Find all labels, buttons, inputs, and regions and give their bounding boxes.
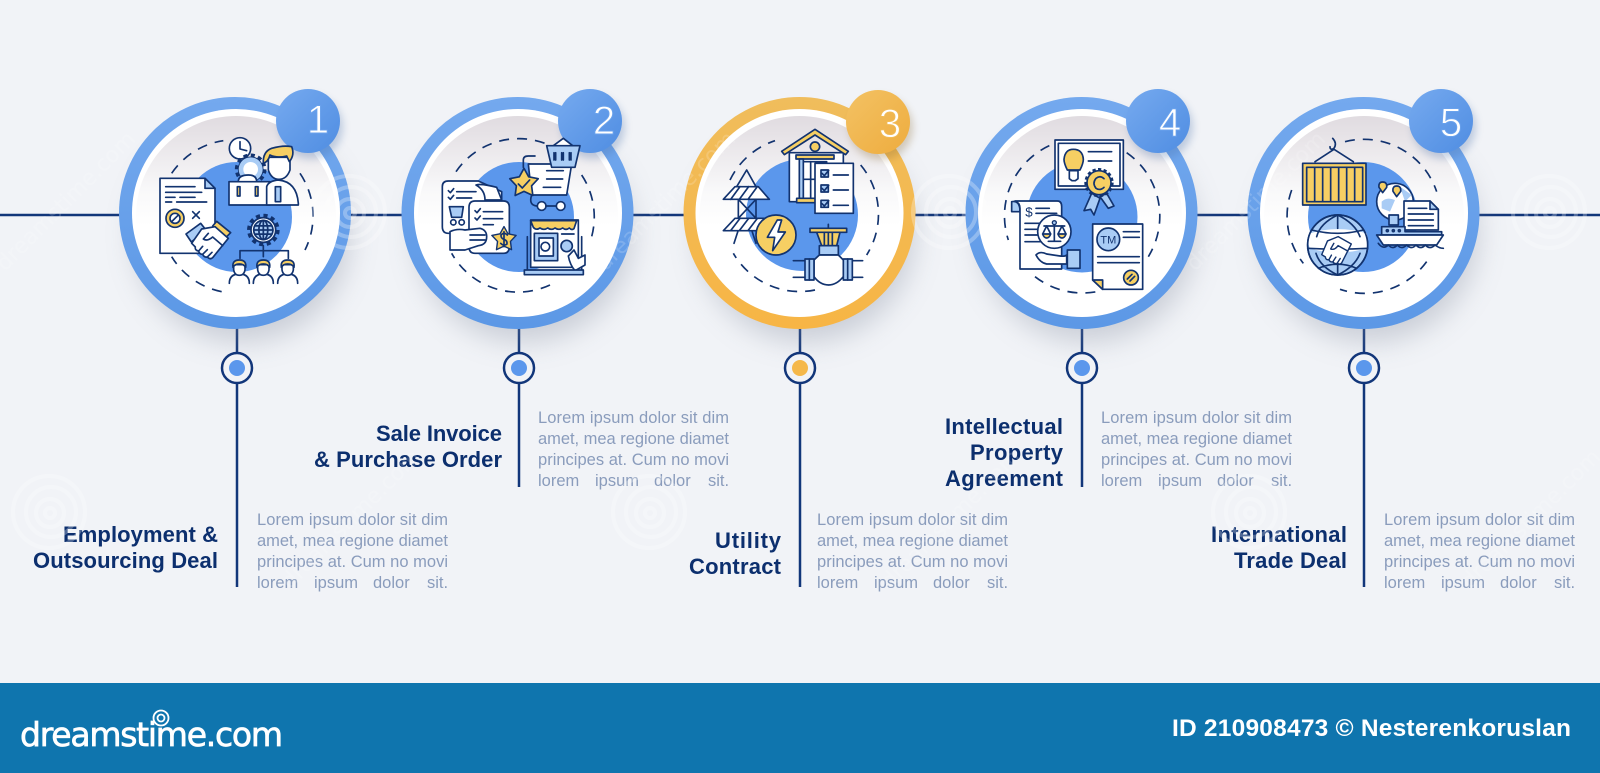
heading 1: Outsourcing Deal — [33, 548, 218, 573]
watermark overlay: dreamstime.com — [1182, 127, 1331, 276]
text block 2 — [538, 409, 729, 490]
heading 5: International — [1211, 522, 1347, 547]
text block 1: lorem — [257, 574, 298, 592]
text block 2: lorem — [538, 472, 579, 490]
node marker 2 — [504, 353, 534, 383]
text block 2: amet, mea regione diamet — [538, 430, 729, 448]
text block 3: sit. — [987, 574, 1008, 592]
text block 5: amet, mea regione diamet — [1384, 532, 1575, 550]
badge 5: 5 — [1440, 101, 1462, 145]
heading 1: Employment & — [63, 522, 218, 547]
text block 3: Lorem ipsum dolor sit dim — [817, 511, 1008, 529]
panel: step 1 employment and outsourcing deal — [33, 89, 448, 592]
text block 2: principes at. Cum no movi — [538, 451, 729, 469]
heading 2: Sale Invoice — [376, 421, 502, 446]
text block 5: ipsum — [1441, 574, 1485, 592]
circle 3 — [684, 97, 916, 342]
heading 2 — [314, 421, 502, 472]
badge 3 — [846, 90, 913, 160]
heading 3: Contract — [689, 554, 782, 579]
heading 5: Trade Deal — [1234, 548, 1347, 573]
text block 5 — [1384, 511, 1575, 592]
node marker 4 — [1067, 353, 1097, 383]
heading 4 — [945, 414, 1064, 491]
heading 1 — [33, 522, 218, 573]
panel: step 2 sale invoice and purchase order — [314, 89, 729, 490]
panel: step 3 utility contract — [684, 90, 1008, 592]
text block 3: amet, mea regione diamet — [817, 532, 1008, 550]
connector line 5 — [1363, 325, 1365, 587]
text block 3: ipsum — [874, 574, 918, 592]
watermark overlay: dreamstime.com — [877, 445, 1026, 594]
text block 5: sit. — [1554, 574, 1575, 592]
panel: step 5 international trade deal — [1211, 89, 1575, 592]
badge 4 — [1126, 89, 1193, 159]
text block 1: dolor — [373, 574, 410, 592]
badge 4: 4 — [1159, 101, 1181, 145]
node marker 1 — [222, 353, 252, 383]
text block 4: amet, mea regione diamet — [1101, 430, 1292, 448]
text block 2: dolor — [654, 472, 691, 490]
circle 5 — [1248, 97, 1480, 342]
watermark overlay: dreamstime.com — [277, 445, 426, 594]
icon: cargo container, globe handshake and ship — [1287, 138, 1443, 293]
connector line 4 — [1081, 325, 1083, 487]
icon: contract, briefcase, employee and team — [160, 138, 313, 292]
badge 1 — [276, 89, 343, 159]
connector line 2 — [518, 325, 520, 487]
text block 4 — [1101, 409, 1292, 490]
badge 5 — [1409, 89, 1476, 159]
footer logo: dreamstime.com — [20, 715, 283, 754]
connector line 1 — [236, 325, 238, 587]
text block 1: principes at. Cum no movi — [257, 553, 448, 571]
horizontal timeline — [0, 214, 1600, 216]
text block 3 — [817, 511, 1008, 592]
text block 4: dolor — [1217, 472, 1254, 490]
heading 2: & Purchase Order — [314, 447, 502, 472]
text block 1: amet, mea regione diamet — [257, 532, 448, 550]
text block 4: ipsum — [1158, 472, 1202, 490]
icon: certificate, legal document and trademark: TM — [1100, 234, 1116, 246]
text block 1: Lorem ipsum dolor sit dim — [257, 511, 448, 529]
node marker 5 — [1349, 353, 1379, 383]
image id and credit: ID 210908473 © Nesterenkoruslan — [1172, 715, 1571, 742]
text block 4: Lorem ipsum dolor sit dim — [1101, 409, 1292, 427]
heading 3 — [689, 528, 782, 579]
text block 1: ipsum — [314, 574, 358, 592]
badge 2: 2 — [593, 99, 615, 143]
icon: certificate, legal document and trademark — [1004, 140, 1160, 293]
badge 2 — [558, 89, 625, 159]
badge 3: 3 — [879, 102, 901, 146]
panel: step 4 intellectual property agreement — [945, 89, 1292, 491]
text block 3: lorem — [817, 574, 858, 592]
badge 1: 1 — [307, 98, 329, 142]
text block 4: sit. — [1271, 472, 1292, 490]
watermark overlay — [0, 127, 1600, 594]
heading 3: Utility — [715, 528, 782, 553]
heading 4: Agreement — [945, 466, 1064, 491]
text block 5: lorem — [1384, 574, 1425, 592]
circle 2 — [402, 97, 634, 342]
text block 3: principes at. Cum no movi — [817, 553, 1008, 571]
heading 5 — [1211, 522, 1347, 573]
text block 4: lorem — [1101, 472, 1142, 490]
text block 5: principes at. Cum no movi — [1384, 553, 1575, 571]
icon: invoices, shopping cart and online store — [442, 138, 594, 292]
node marker 3 — [785, 353, 815, 383]
icon: power tower, house checklist and gas valve — [723, 129, 878, 292]
heading 4: Property — [970, 440, 1064, 465]
text block 5: dolor — [1500, 574, 1537, 592]
circle 4 — [966, 97, 1198, 342]
text block 2: ipsum — [595, 472, 639, 490]
text block 1: sit. — [427, 574, 448, 592]
text block 3: dolor — [933, 574, 970, 592]
circle 1 — [119, 97, 351, 342]
text block 4: principes at. Cum no movi — [1101, 451, 1292, 469]
icon: certificate, legal document and trademark: $ — [1025, 205, 1033, 220]
heading 4: Intellectual — [945, 414, 1063, 439]
text block 2: sit. — [708, 472, 729, 490]
connector line 3 — [799, 325, 801, 587]
text block 2: Lorem ipsum dolor sit dim — [538, 409, 729, 427]
watermark overlay: dreamstime.com — [592, 127, 741, 276]
footer bar — [0, 683, 1600, 773]
text block 5: Lorem ipsum dolor sit dim — [1384, 511, 1575, 529]
text block 1 — [257, 511, 448, 592]
